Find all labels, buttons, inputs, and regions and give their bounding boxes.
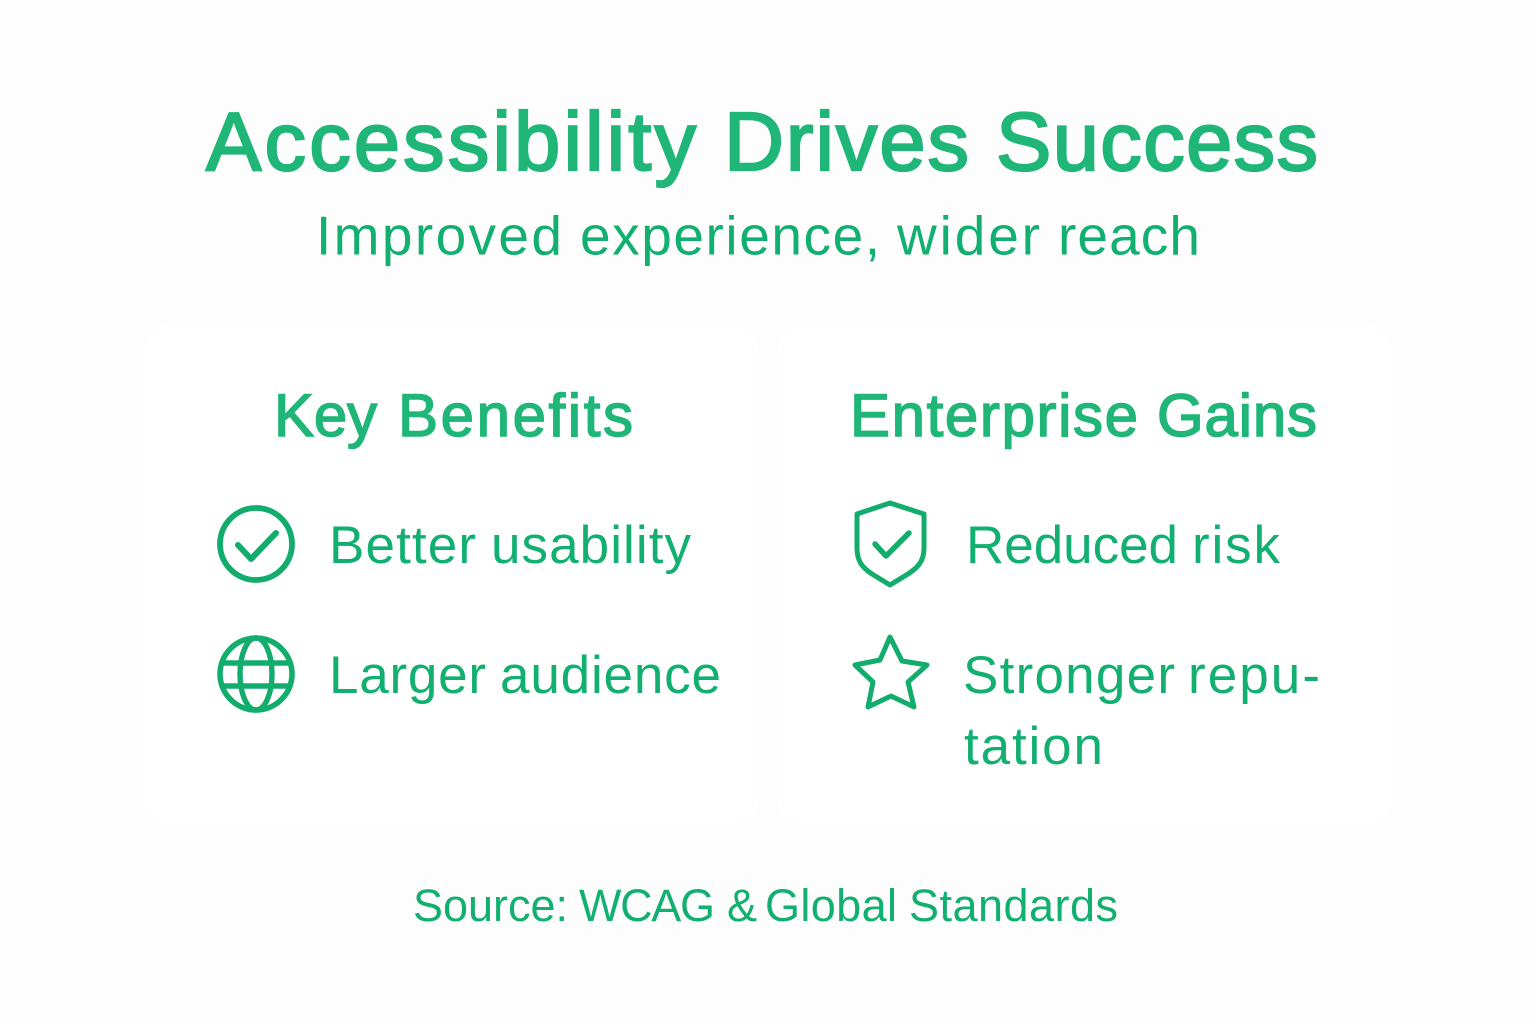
text: better usability: Better (329, 516, 476, 575)
text: reduced risk: Reduced (966, 516, 1178, 575)
text: larger audience: audience (500, 646, 721, 705)
title: Drives (724, 95, 969, 188)
text: reduced risk: risk (1192, 516, 1280, 575)
heading: enterprise gains: Gains (1157, 382, 1317, 449)
panel: key benefits (144, 326, 758, 824)
source: & (727, 880, 757, 931)
source: WCAG (579, 880, 715, 931)
source: Standards (909, 880, 1118, 931)
heading: key benefits: Key (274, 382, 377, 449)
subtitle: experience, (580, 204, 880, 266)
heading: key benefits: Benefits (398, 382, 633, 449)
source: Global (765, 880, 897, 931)
text: stronger reputation: Stronger (963, 646, 1175, 705)
icon: shield check (857, 503, 924, 585)
source: Source: (413, 880, 568, 931)
icon: globe (220, 638, 292, 710)
icon: star (855, 637, 927, 707)
title: Success (996, 95, 1318, 188)
heading: enterprise gains: Enterprise (850, 382, 1138, 449)
text: stronger reputation (963, 646, 1320, 776)
subtitle: Improved (316, 204, 562, 266)
subtitle: reach (1058, 204, 1200, 266)
text: better usability: usability (491, 516, 692, 575)
text: stronger reputation: repu- (1188, 646, 1320, 705)
title: Accessibility (206, 95, 696, 188)
panel: enterprise gains (778, 326, 1392, 824)
text: larger audience: Larger (329, 646, 486, 705)
icon: check circle (220, 508, 292, 580)
subtitle: wider (896, 204, 1040, 266)
text: stronger reputation: tation (964, 717, 1103, 776)
